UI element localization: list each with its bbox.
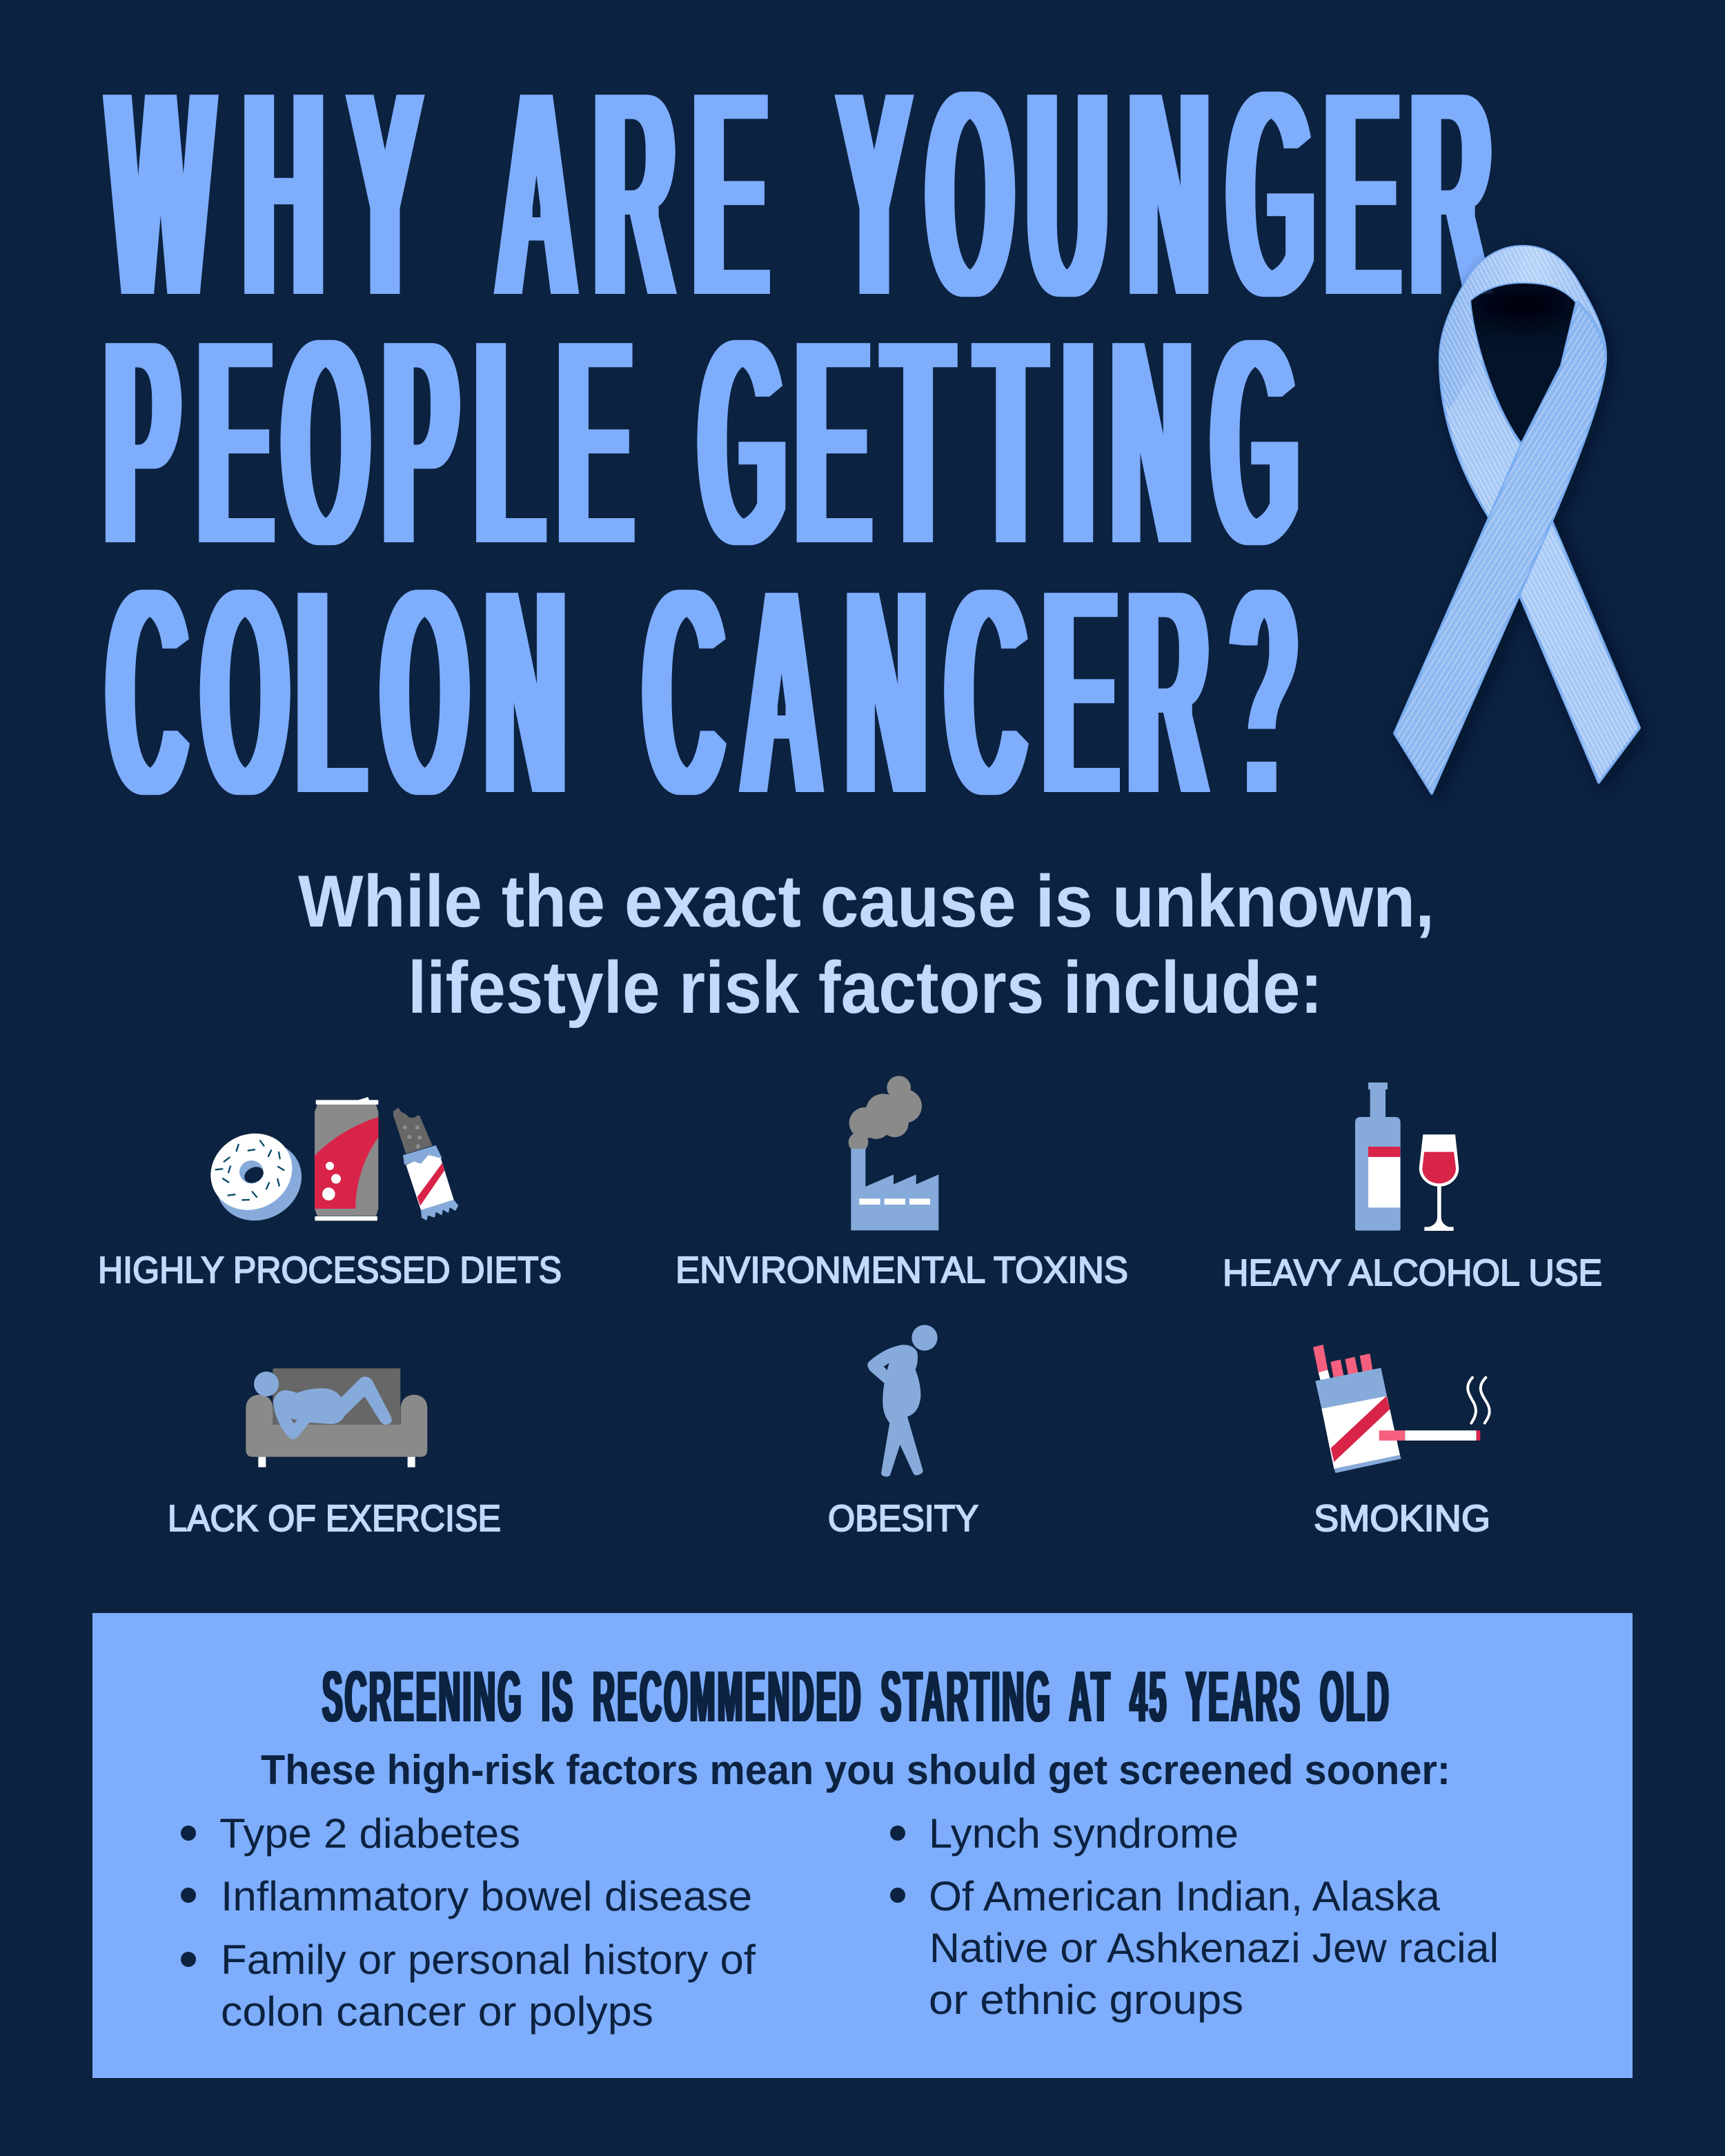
left bullet list: Family or personal history of [221,1937,756,1983]
label: highly processed diets: HIGHLY PROCESSED DIETS [98,1249,562,1291]
title line 2: PEOPLE GETTING [105,273,1298,612]
icon: donut, soda can and candy bar [197,1097,458,1236]
label: heavy alcohol use: HEAVY ALCOHOL USE [1223,1252,1602,1294]
label: environmental toxins: ENVIRONMENTAL TOXINS [676,1249,1128,1291]
risk factor: lack of exercise [168,1368,501,1539]
subtitle [298,860,1435,1029]
ribbon back band and loop [1440,246,1639,782]
risk factor: obesity [828,1325,978,1539]
awareness ribbon [1394,246,1644,799]
right bullet list: Native or Ashkenazi Jew racial [929,1925,1499,1971]
panel: screening [92,1613,1633,2078]
risk factor: environmental toxins [676,1076,1128,1291]
left bullet list [181,1810,756,2035]
right bullet list: Of American Indian, Alaska [929,1873,1441,1919]
panel heading: SCREENING IS RECOMMENDED STARTING AT 45 YEARS OLD [322,1656,1389,1737]
subtitle line 2: lifestyle risk factors include: [408,946,1323,1029]
right bullet list: Lynch syndrome [929,1810,1239,1857]
left bullet list: colon cancer or polyps [221,1988,653,2035]
icon: person lying on couch [246,1368,427,1467]
icon: wine bottle and glass [1355,1082,1459,1231]
panel subheading: These high-risk factors mean you should get screened sooner: [261,1747,1450,1793]
label: lack of exercise: LACK OF EXERCISE [168,1498,501,1539]
risk factor: smoking [1313,1345,1490,1539]
label: obesity: OBESITY [828,1498,978,1539]
title [105,25,1491,862]
right bullet list [890,1810,1499,2023]
icon: cigarette pack and cigarette [1313,1345,1490,1473]
left bullet list: Type 2 diabetes [219,1810,520,1857]
risk factor: heavy alcohol use [1223,1082,1602,1294]
title line 3: COLON CANCER? [108,523,1298,862]
label: smoking: SMOKING [1314,1498,1490,1539]
left bullet list: Inflammatory bowel disease [221,1873,752,1919]
title line 1: WHY ARE YOUNGER [108,25,1491,364]
panel background [92,1613,1633,2078]
risk factor: highly processed diets [98,1097,562,1291]
ribbon front band [1394,302,1606,793]
icon: obese figure [867,1325,938,1476]
right bullet list: or ethnic groups [929,1977,1243,2023]
subtitle line 1: While the exact cause is unknown, [298,860,1435,942]
icon: factory with smoke [849,1076,938,1230]
